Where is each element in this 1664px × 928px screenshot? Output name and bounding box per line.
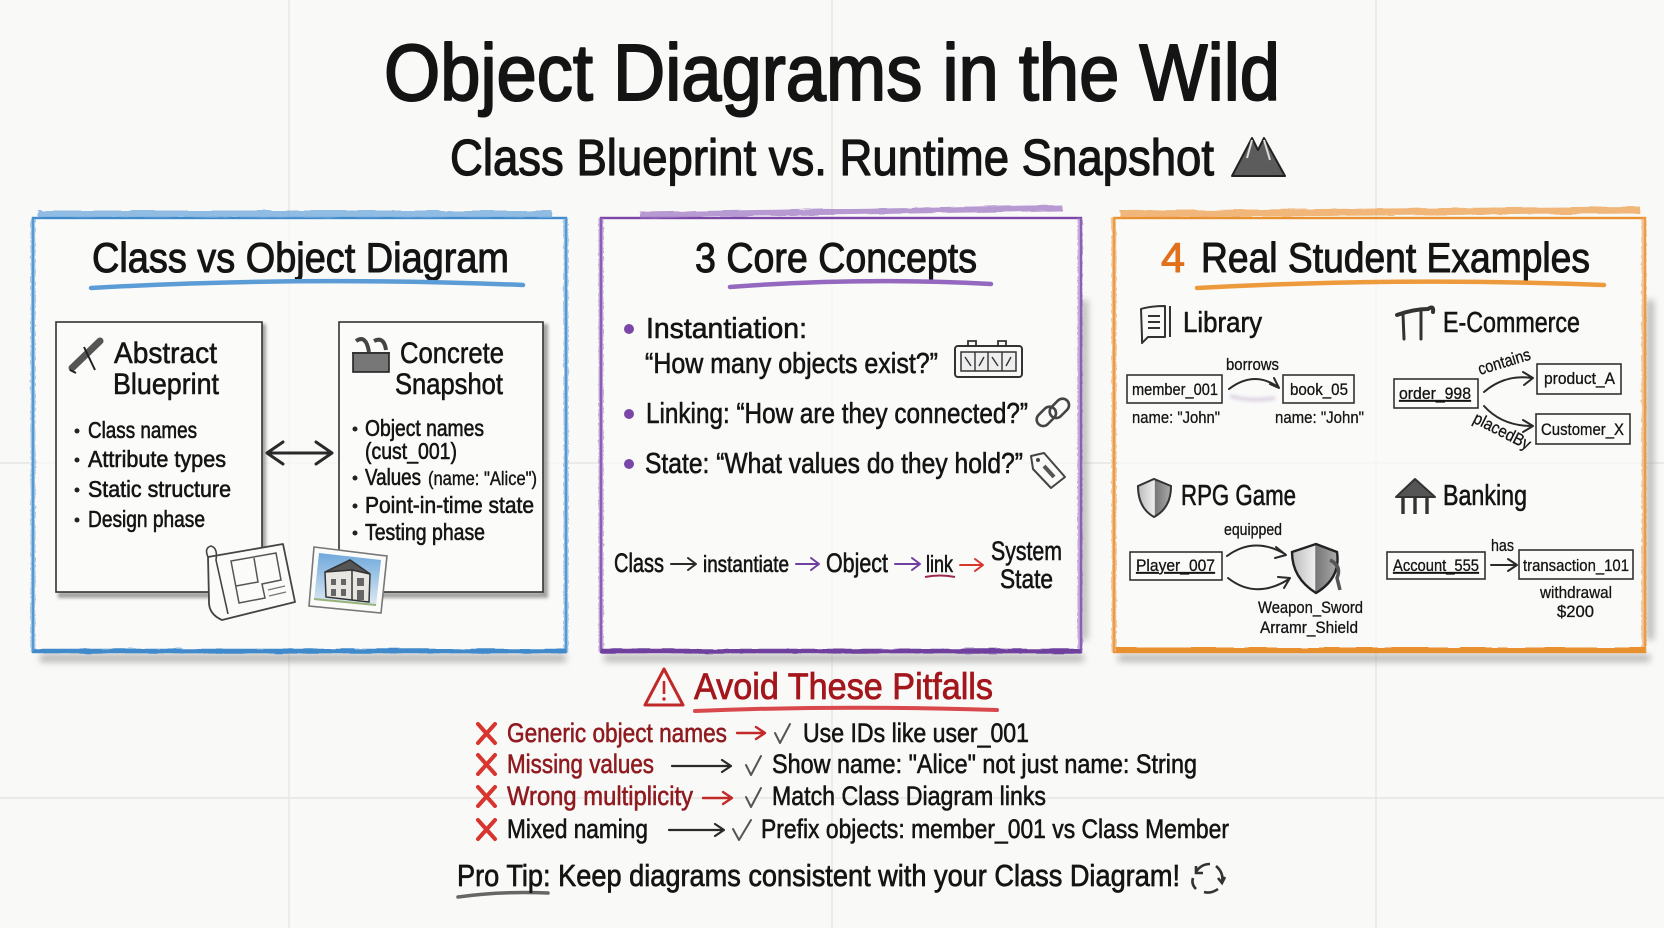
example: banking: Account_555 [1393,556,1479,575]
example: banking [1387,479,1633,621]
bullet list: Testing phase [365,519,485,545]
bullet list: Design phase [88,506,205,532]
bullet list: Static structure [88,476,231,502]
bullet list [352,415,537,545]
example: rpg game: Arramr_Shield [1260,618,1358,637]
example: banking: $200 [1557,602,1594,621]
concept: instantiation [624,313,1022,380]
pitfall row 3: Match Class Diagram links [772,781,1046,811]
icon: bank [1396,479,1435,514]
example: banking: transaction_101 [1523,556,1629,575]
pitfall row 2: Show name: "Alice" not just name: String [772,749,1197,779]
example: e-commerce: placedBy [1470,409,1534,454]
example: library: book_05 [1290,380,1348,399]
flow: class to system state: instantiate [703,551,789,577]
pro tip underline [458,892,548,897]
pitfall row 3 [478,781,1046,811]
card title: Blueprint [113,368,220,401]
arrow: bidirectional [267,442,332,464]
example: library [1127,306,1364,427]
pro tip: Pro Tip: Keep diagrams consistent with your Class Diagram! [457,858,1180,893]
pitfall row 4: Prefix objects: member_001 vs Class Member [761,814,1229,844]
example: e-commerce: order_998 [1399,384,1471,403]
heading underline [730,281,991,287]
heading: 4 real student examples: 4 [1161,234,1185,281]
card title: Snapshot [395,368,504,401]
bullet list: (name: "Alice") [428,469,537,490]
icon: columns [1397,308,1433,339]
icon: counter [955,341,1022,377]
pitfall row 4: Mixed naming [507,814,648,844]
icon: small shield [1138,479,1171,517]
heading underline [91,281,523,288]
flow: class to system state: System [991,536,1062,566]
bullet list: (cust_001) [365,438,457,464]
pitfall row 2 [478,749,1197,779]
bullet list: Attribute types [88,446,226,472]
icon: book [1141,306,1170,343]
bullet list: Class names [88,417,197,443]
example: e-commerce: contains [1476,345,1533,379]
icon: warning triangle [645,669,683,705]
card title [113,337,220,401]
heading underline [1197,282,1604,288]
heading: class vs object diagram: Class vs Object Diagram [92,234,509,281]
illustration: building photo [309,547,387,613]
pitfall row 1 [478,718,1029,748]
example: e-commerce: product_A [1544,369,1616,388]
example: library: name: "John" [1132,408,1220,427]
example: e-commerce: E-Commerce [1443,307,1580,339]
icon: drafting tool [70,341,100,373]
heading: 4 real student examples: Real Student Examples [1201,234,1590,281]
panel: 3 core concepts [601,208,1084,658]
flow: class to system state: Object [826,548,888,578]
card: concrete snapshot [339,322,545,595]
example: rpg game: RPG Game [1181,480,1296,512]
example: library: name: "John" [1275,408,1364,427]
concept: instantiation: “How many objects exist?” [645,348,938,380]
flow: class to system state: Class [614,548,664,578]
example: rpg game: equipped [1224,520,1282,539]
illustration: blueprint sheet [207,544,295,620]
panel: class vs object diagram [33,214,566,658]
bullet list: Values [365,464,421,490]
card title: Abstract [114,337,218,370]
bullet list [74,417,231,532]
example: e-commerce [1394,307,1630,454]
heading: avoid these pitfalls: Avoid These Pitfalls [694,666,993,707]
example: banking: withdrawal [1539,583,1612,602]
icon: cycle arrows [1192,864,1225,893]
example: rpg game: Player_007 [1136,556,1215,575]
icon: tag [1031,453,1065,488]
panel: 4 real student examples [1114,210,1650,658]
example: banking: has [1491,536,1514,555]
flow: class to system state: State [1000,564,1053,594]
heading underline [695,708,997,711]
example: banking: Banking [1443,480,1527,512]
flow: class to system state [614,536,1062,594]
pitfall row 1: Use IDs like user_001 [803,718,1029,748]
pitfall row 2: Missing values [507,749,654,779]
icon: mountains [1232,138,1285,176]
icon: large shield [1292,544,1338,593]
example: rpg game: Weapon_Sword [1258,598,1363,617]
example: e-commerce: Customer_X [1541,420,1624,439]
pitfall row 4 [478,814,1229,844]
example: library: borrows [1226,355,1279,374]
heading: 3 core concepts: 3 Core Concepts [695,234,977,281]
card title [395,337,504,401]
pitfall row 3: Wrong multiplicity [507,781,693,811]
title: Object Diagrams in the Wild [384,28,1280,117]
pitfall row 1: Generic object names [507,718,727,748]
icon: chain link [1034,396,1072,429]
example: rpg game [1130,479,1363,637]
example: library: member_001 [1132,380,1218,399]
section: avoid these pitfalls [478,666,1229,844]
flow: class to system state: link [926,551,953,577]
concept: linking: Linking: “How are they connected?” [646,398,1028,430]
concept: state: State: “What values do they hold?” [645,448,1023,480]
concept: instantiation: Instantiation: [646,313,807,345]
subtitle: Class Blueprint vs. Runtime Snapshot [450,129,1214,186]
bullet list: Object names [365,415,484,441]
card title: Concrete [400,337,504,370]
card: abstract blueprint [56,322,263,595]
bullet list: Point-in-time state [365,492,534,518]
example: library: Library [1183,307,1262,339]
icon: toolbox [352,339,390,372]
